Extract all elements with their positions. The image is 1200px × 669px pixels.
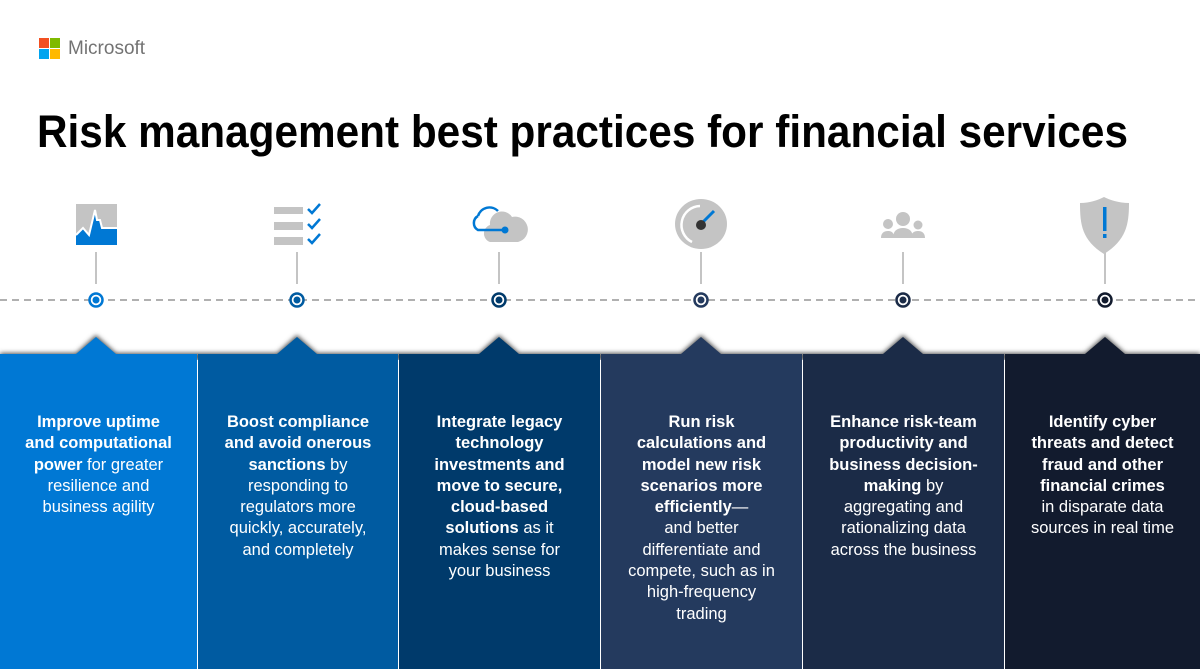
- panel 3: solutions as it: [445, 519, 554, 537]
- panel 4: differentiate and: [642, 541, 761, 559]
- panel 2: and completely: [242, 541, 353, 559]
- panel 5: [803, 354, 1004, 669]
- panel 3: [399, 354, 600, 669]
- panel 2: quickly, accurately,: [230, 519, 366, 537]
- icon: people: [881, 212, 925, 238]
- panel 4: trading: [676, 605, 727, 623]
- panel 3: makes sense for: [439, 541, 560, 559]
- panel 4: and better: [664, 519, 739, 537]
- panel 6: Identify cyber: [1049, 413, 1156, 431]
- panel shadows + triangles: [0, 332, 1200, 360]
- panel 6: [1005, 354, 1200, 669]
- panel 3: cloud-based: [451, 498, 548, 516]
- panel 3: investments and: [434, 456, 565, 474]
- panel 2: sanctions by: [248, 456, 348, 474]
- icon: cloud: [474, 207, 528, 242]
- panel 5: business decision-: [829, 456, 978, 474]
- timeline dots: [90, 294, 1112, 306]
- panel 3: Integrate legacy: [437, 413, 562, 431]
- icon: checklist: [274, 204, 320, 245]
- panel 4: compete, such as in: [628, 562, 775, 580]
- panel 6: sources in real time: [1031, 519, 1174, 537]
- panel 4: scenarios more: [640, 477, 762, 495]
- panel 4: Run risk: [668, 413, 735, 431]
- panel 2: responding to: [248, 477, 348, 495]
- panel 6: in disparate data: [1041, 498, 1164, 516]
- panel 2: and avoid onerous: [225, 434, 371, 452]
- panel 5: rationalizing data: [841, 519, 966, 537]
- panel 4: model new risk: [642, 456, 761, 474]
- panel 2: Boost compliance: [227, 413, 369, 431]
- panel 1: and computational: [25, 434, 172, 452]
- panel 2: regulators more: [240, 498, 356, 516]
- panel 3: move to secure,: [437, 477, 562, 495]
- panel 4: efficiently—: [655, 498, 748, 516]
- panel 1: resilience and: [48, 477, 149, 495]
- timeline: [0, 197, 1195, 308]
- panel 5: productivity and: [839, 434, 968, 452]
- panel 6: fraud and other: [1042, 456, 1163, 474]
- panel 3: technology: [455, 434, 544, 452]
- panel 6: threats and detect: [1031, 434, 1174, 452]
- panel 2: [198, 354, 398, 669]
- panel 1: Improve uptime: [37, 413, 160, 431]
- panel 5: aggregating and: [844, 498, 963, 516]
- panel 4: [601, 354, 802, 669]
- panel 5: making by: [864, 477, 943, 495]
- panel 5: Enhance risk-team: [830, 413, 977, 431]
- panel 4: calculations and: [637, 434, 766, 452]
- panel 1: [0, 354, 197, 669]
- panel 6: financial crimes: [1040, 477, 1165, 495]
- panel 1: business agility: [43, 498, 154, 516]
- panel 3: your business: [449, 562, 550, 580]
- icon: chart: [76, 204, 117, 245]
- title: Risk management best practices for financial services: [37, 106, 1128, 157]
- panel 1: power for greater: [34, 456, 163, 474]
- panel 5: across the business: [831, 541, 976, 559]
- icon: shield: [1080, 197, 1129, 254]
- logo: Microsoft: [68, 38, 145, 59]
- icon: gauge: [675, 199, 727, 249]
- panel 4: high-frequency: [647, 583, 756, 601]
